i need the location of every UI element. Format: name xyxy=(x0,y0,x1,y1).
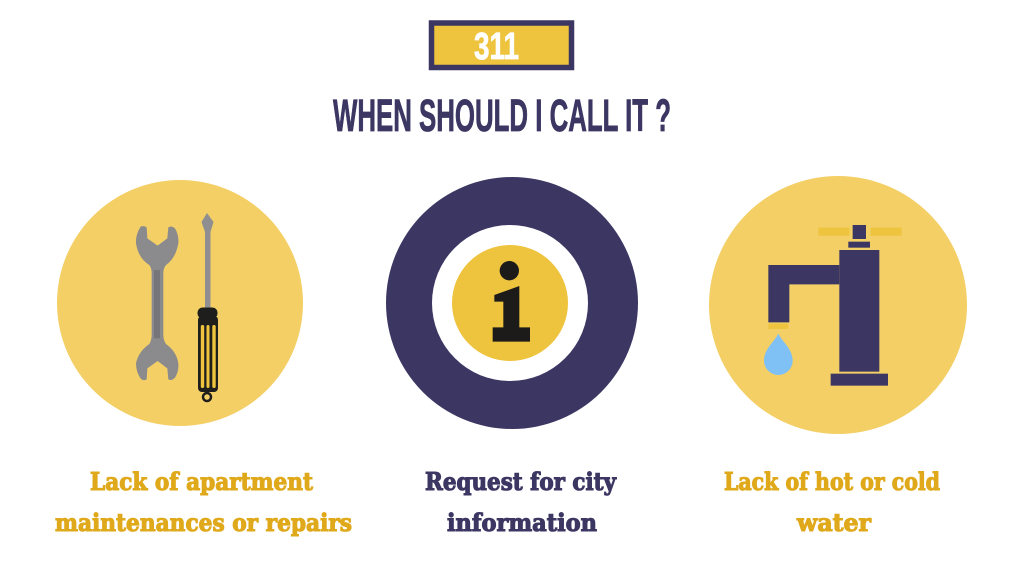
icon background: navy ring xyxy=(386,177,638,429)
label: city information: information xyxy=(447,508,597,537)
label: hot or cold water xyxy=(724,467,940,537)
icon background: right circle xyxy=(709,176,967,434)
icon: screwdriver xyxy=(198,213,218,401)
badge: 311 xyxy=(432,23,572,68)
label: apartment repairs: maintenances or repairs xyxy=(55,508,352,537)
panel: apartment repairs xyxy=(55,180,352,537)
white inner ring xyxy=(432,225,588,381)
panel: city information xyxy=(386,177,638,537)
panel: hot or cold water xyxy=(709,176,967,537)
label: city information: Request for city xyxy=(425,467,617,496)
yellow inner circle xyxy=(452,245,568,361)
label: apartment repairs xyxy=(55,467,352,537)
icon: water drop xyxy=(764,333,793,375)
label: hot or cold water: Lack of hot or cold xyxy=(724,467,940,496)
icon: letter i xyxy=(493,261,530,342)
icon: faucet xyxy=(768,225,902,386)
label: hot or cold water: water xyxy=(796,508,871,537)
label: apartment repairs: Lack of apartment xyxy=(90,467,313,496)
icon: wrench xyxy=(136,226,178,380)
badge: 311: 311 xyxy=(474,26,519,68)
title: WHEN SHOULD I CALL IT ? xyxy=(333,90,671,141)
icon background: left circle xyxy=(57,180,303,426)
label: city information xyxy=(425,467,617,537)
